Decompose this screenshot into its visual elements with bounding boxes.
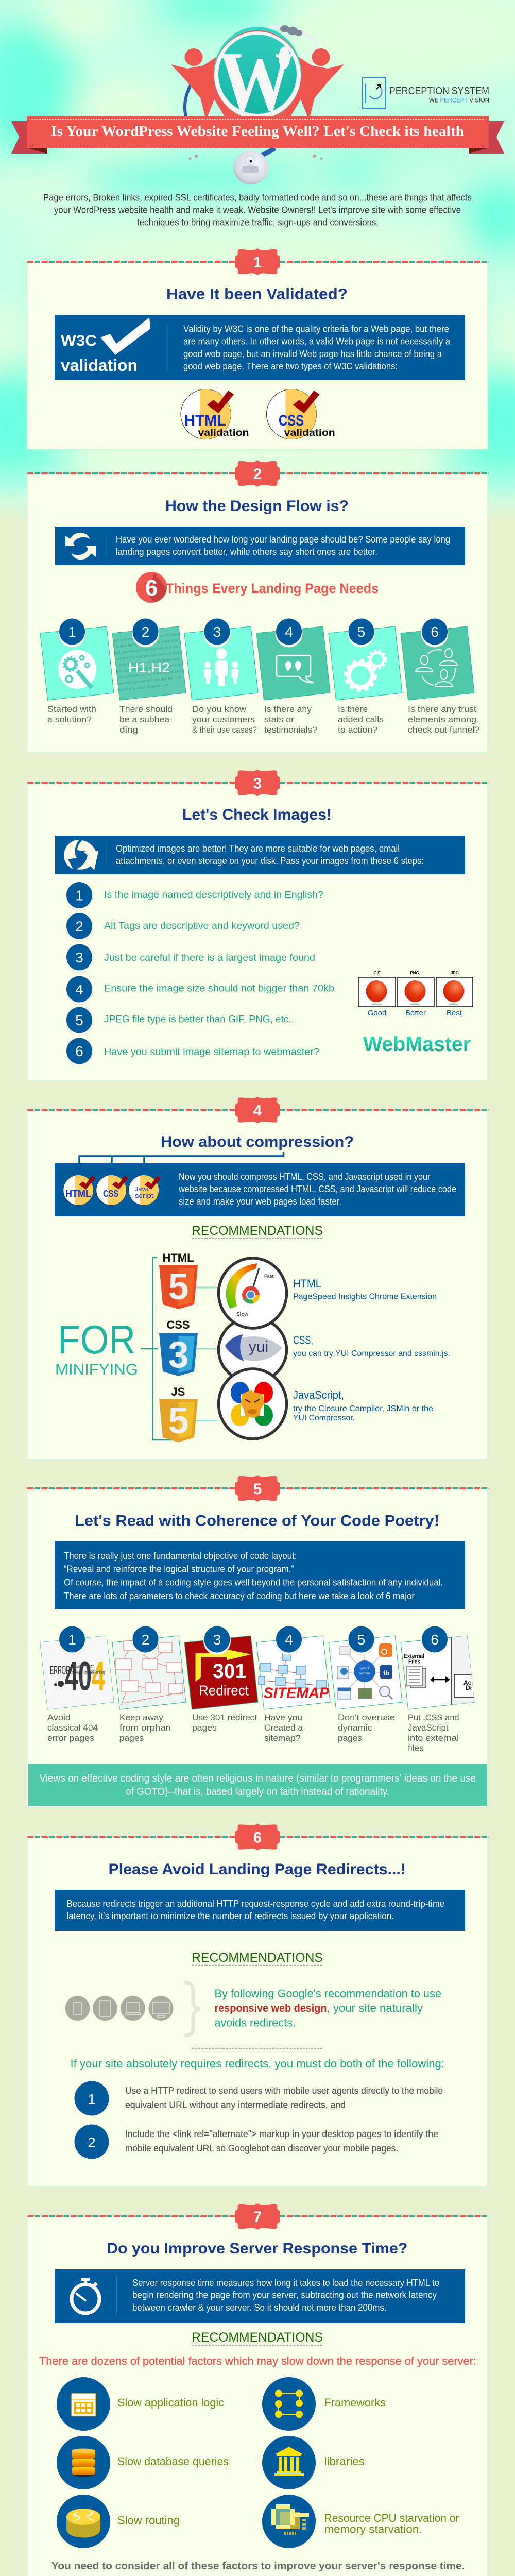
card 6: external files (400, 1635, 475, 1751)
icon: JS shield: JS (171, 1385, 185, 1398)
icon: HTML validation: validation (198, 428, 249, 438)
heading: Please Avoid Landing Page Redirects...! (108, 1861, 406, 1878)
closing note: You need to consider all of these factors to improve your server's response time. (52, 2561, 465, 2572)
number circles: 5 (357, 1632, 365, 1648)
responsive design text: responsive web design (214, 2002, 327, 2014)
card 6: external files: Files (408, 1658, 420, 1665)
number circles: 5 (357, 624, 365, 640)
icon: JS shield (159, 1385, 198, 1443)
card 5: calls to action: to action? (338, 725, 377, 735)
icon: CSS3 shield: CSS (166, 1318, 190, 1331)
callout: W3C: validation (61, 356, 138, 375)
image format comparison: Best (447, 1009, 462, 1018)
card 1: solution (40, 626, 114, 724)
card 2: orphan pages: from orphan (119, 1723, 171, 1733)
badge 4: 4 (253, 1103, 262, 1119)
callout: landing page length (55, 527, 465, 565)
card 6: external files: Put .CSS and (408, 1713, 459, 1722)
icon: HTML5 shield: HTML (162, 1251, 194, 1264)
HTML recommendation (293, 1277, 437, 1301)
steps list: 2 (75, 918, 83, 935)
callout: redirects: latency, it's important to minimize the number of redirects issued by your application. (67, 1911, 394, 1921)
bracket lines (141, 1258, 174, 1440)
callout: coding style views: of GOTO)--that is, based largely on faith instead of rationality. (126, 1786, 389, 1798)
item 2 (74, 2125, 438, 2159)
callout: landing page length: Have you ever wondered how long your landing page should be? Some people say long (116, 534, 450, 545)
callout: W3C: good web page, but an invalid Web page has little chance of being a (183, 349, 442, 359)
callout: W3C: Validity by W3C is one of the quality criteria for a Web page, but there (183, 324, 449, 334)
card 5: dynamic pages: pages (338, 1733, 362, 1743)
intro text (43, 193, 472, 228)
number circles: 3 (213, 1632, 221, 1648)
factor: resource starvation: memory starvation. (324, 2522, 422, 2536)
JavaScript recommendation: YUI Compressor. (293, 1414, 355, 1422)
card 3: 301 redirect: Redirect (199, 1683, 249, 1698)
number circles: 2 (142, 1632, 149, 1648)
icon: PageSpeed gauge oval (218, 1258, 286, 1328)
sub-heading: If your site absolutely requires redirects, you must do both of the following: (70, 2057, 444, 2070)
card 1: 404: classical 404 (47, 1723, 98, 1733)
steps list: 1 (75, 887, 83, 904)
image format comparison: PNG (410, 971, 419, 975)
card 1: 404: Avoid (47, 1713, 71, 1722)
callout: compress: script (135, 1192, 153, 1199)
sub-heading: 6 things: 6 (145, 575, 158, 601)
recommendations heading: RECOMMENDATIONS (192, 1951, 323, 1965)
card 6: trust elements: check out funnel? (408, 725, 479, 735)
for minifying label: MINIFYING (55, 1361, 138, 1378)
main title: Is Your WordPress Website Feeling Well? Let's Check its health (51, 124, 464, 140)
callout: redirects: Because redirects trigger an additional HTTP request-response cycle and add extra round-trip-time (67, 1899, 444, 1909)
card 4: sitemap (256, 1636, 330, 1743)
steps list: Have you submit image sitemap to webmaster? (104, 1047, 319, 1058)
number circles: 1 (68, 624, 76, 640)
connectors to ovals (195, 1287, 218, 1421)
card 3: customers (184, 626, 258, 735)
heading: Let's Read with Coherence of Your Code Poetry! (75, 1513, 439, 1529)
card 1: 404: 404 (65, 1653, 105, 1699)
responsive design text (214, 1987, 441, 2029)
callout: optimized images: Optimized images are better! They are more suitable for web pages, email (116, 843, 400, 854)
badge 3 (235, 770, 280, 796)
card 1: 404: the PAGE you ARE looking (71, 1670, 105, 1676)
number circles: 1 (68, 1632, 76, 1648)
card 4: sitemap: SITEMAP (264, 1685, 330, 1702)
card 6: external files: JavaScript (408, 1723, 449, 1733)
steps list: Just be careful if there is a largest image found (104, 953, 315, 963)
card 4: testimonials: testimonials? (264, 725, 317, 735)
card 2: subheading: text text text text text text text text text text text (109, 662, 188, 674)
steps list: 5 (75, 1012, 83, 1028)
responsive design text: By following Google's recommendation to use (214, 1987, 441, 2000)
card 3: 301 redirect: 301 (213, 1660, 246, 1683)
factor: slow database queries (57, 2436, 229, 2489)
card 2: subheading: text text text text text text text text text text text (107, 643, 186, 656)
number circles (59, 618, 448, 647)
factor: slow database queries: Slow database queries (117, 2455, 229, 2468)
card 1: 404: we don't GOTO SAY (70, 1664, 94, 1669)
title ribbon (11, 116, 504, 154)
card 5: dynamic pages: Don't overuse (338, 1713, 395, 1722)
card 1: 404 (40, 1636, 114, 1743)
heading: Do you Improve Server Response Time? (107, 2240, 407, 2257)
badge 6: 6 (253, 1829, 262, 1846)
number circles: 4 (285, 1632, 293, 1648)
responsive design text: , your site naturally (327, 2002, 423, 2014)
icon: HTML5 shield: 5 (168, 1266, 189, 1308)
badge 4 (235, 1096, 280, 1123)
callout: redirects (55, 1890, 465, 1931)
item 2: Include the <link rel="alternate"> markup in your desktop pages to identify the (125, 2129, 438, 2139)
panel 6: landing page redirects (26, 1824, 489, 2187)
icon: YUI oval: yui (249, 1338, 268, 1355)
icon: HTML validation: HTML (184, 412, 226, 429)
factor: frameworks (262, 2377, 386, 2431)
recommendations heading: RECOMMENDATIONS (192, 1224, 323, 1238)
callout: coding style views: Views on effective coding style are often religious in nature (similar to programmers' ideas on the use (39, 1773, 476, 1784)
CSS recommendation: CSS, (293, 1333, 313, 1347)
card 2: subheading (112, 626, 186, 735)
card 2: orphan pages (112, 1636, 186, 1743)
factor: libraries (262, 2436, 365, 2489)
icon: CSS validation: CSS (279, 412, 304, 429)
icon: CSS3 shield: 3 (168, 1334, 189, 1376)
panel 1: validation (26, 248, 489, 449)
callout: compress: Now you should compress HTML, CSS, and Javascript used in your (179, 1172, 431, 1182)
badge 6 (235, 1824, 280, 1851)
badge 5: 5 (253, 1481, 262, 1498)
steps list: Ensure the image size should not bigger than 70kb (104, 983, 334, 994)
callout: optimized images: attachments, or even storage on your disk. Pass your images from these 6 steps: (116, 856, 424, 866)
hero illustration: WordPress logo with stethoscope: W (218, 34, 293, 128)
panel 4: compression (26, 1096, 489, 1460)
JavaScript recommendation (293, 1388, 433, 1422)
factor: resource starvation (262, 2495, 459, 2548)
connector lines (79, 1152, 283, 1163)
card 2: orphan pages: Keep away (119, 1713, 163, 1722)
icon: PageSpeed gauge oval: Slow (236, 1312, 249, 1317)
callout: code layout (55, 1541, 465, 1609)
JavaScript recommendation: JavaScript, (293, 1388, 344, 1401)
icon: PageSpeed gauge oval: Fast (264, 1274, 274, 1279)
logo: Perception System (363, 78, 489, 109)
factor: slow application logic: Slow application logic (117, 2396, 224, 2409)
card 6: external files: External (404, 1653, 424, 1660)
card 4: testimonials: stats or (264, 715, 294, 724)
callout: compress: CSS (103, 1189, 118, 1199)
card 4: testimonials: Is there any (264, 704, 312, 714)
steps list: 4 (75, 981, 83, 997)
callout: optimized images (55, 836, 465, 874)
card 5: dynamic pages (329, 1636, 402, 1743)
card 5: dynamic pages: website (359, 1672, 370, 1675)
icon: CSS validation: validation (284, 428, 335, 438)
icon: CSS3 shield (159, 1318, 198, 1376)
panel 2: design flow (26, 460, 489, 752)
heading: Let's Check Images! (182, 806, 332, 823)
number circles: 3 (213, 624, 221, 640)
heading: Have It been Validated? (166, 285, 348, 303)
factor: slow application logic (57, 2377, 224, 2431)
webmaster logo: WebMaster (363, 1033, 471, 1056)
number circles: 2 (142, 624, 149, 640)
card 2: subheading: There should (119, 704, 173, 714)
steps list (66, 882, 334, 1066)
responsive design text: avoids redirects. (214, 2016, 296, 2029)
card 2: subheading: be a subhea- (119, 715, 173, 724)
callout: landing page length: landing pages convert better, while others say short ones are better. (116, 547, 377, 557)
brace (184, 1982, 200, 2036)
card 6: external files: files (408, 1743, 424, 1753)
icon: YUI oval (218, 1317, 286, 1382)
intro text: your WordPress website health and make it weak. Website Owners!! Let's improve site with some effective (54, 205, 461, 215)
card 2: subheading: text text text text text text text text text text text (105, 631, 185, 644)
hero illustration: WordPress logo with stethoscope (171, 25, 344, 184)
steps list: JPEG file type is better than GIF, PNG, etc.. (104, 1014, 294, 1025)
card 5: dynamic pages: fb (383, 1669, 389, 1677)
callout: compress (55, 1163, 465, 1216)
callout: response time: between crawler & your server. So it should not more than 200ms. (132, 2302, 386, 2313)
factor: slow routing (57, 2495, 180, 2548)
callout: W3C: good web page. There are two types of W3C validations: (183, 361, 398, 371)
icon: CSS validation (267, 389, 335, 439)
for minifying label (55, 1317, 138, 1378)
panel 5: code poetry (26, 1475, 489, 1807)
callout: compress: website because compressed HTML, CSS, and Javascript will reduce code (178, 1184, 456, 1194)
card 3: customers: your customers (192, 715, 255, 724)
heading: How the Design Flow is? (165, 498, 349, 515)
item 2: mobile equivalent URL so Googlebot can discover your mobile pages. (125, 2143, 398, 2154)
card 2: orphan pages: pages (119, 1733, 144, 1743)
steps list: 3 (75, 950, 83, 965)
icon: devices (65, 1996, 173, 2021)
card 3: customers: & their use cases? (192, 725, 257, 735)
icon: JS shield: 5 (168, 1400, 189, 1442)
callout: code layout: Of course, the impact of a coding style goes well beyond the personal satisfaction of any individual. (64, 1578, 443, 1588)
card 6: external files: into external (408, 1733, 459, 1743)
card 4: sitemap: Created a (264, 1723, 303, 1733)
badge 1 (235, 248, 280, 275)
card 3: 301 redirect: pages (192, 1723, 217, 1733)
card 4: sitemap: Have you (264, 1713, 302, 1722)
steps list: 6 (75, 1043, 83, 1059)
callout: compress: Java (135, 1185, 149, 1193)
card 6: trust elements (401, 626, 479, 735)
badge 7: 7 (253, 2209, 262, 2226)
factor: frameworks: Frameworks (324, 2396, 386, 2409)
badge 2: 2 (253, 466, 262, 483)
callout: W3C (55, 315, 465, 380)
card 2: subheading: text text text text text text text text text text text (108, 655, 187, 668)
HTML recommendation: PageSpeed Insights Chrome Extension (293, 1292, 437, 1301)
card 3: 301 redirect (184, 1636, 258, 1733)
callout: response time: Server response time measures how long it takes to load the necessary HTML to (132, 2278, 439, 2288)
image format comparison: JPG (451, 971, 459, 975)
factor: libraries: libraries (324, 2455, 365, 2468)
badge 3: 3 (253, 775, 262, 792)
heading: How about compression? (161, 1133, 354, 1150)
card 1: solution: a solution? (47, 715, 92, 724)
number circles: 6 (431, 624, 439, 640)
badge 1: 1 (253, 254, 262, 271)
card 3: customers: Do you know (192, 704, 247, 714)
logo: Perception System: PERCEPTION SYSTEM (389, 86, 489, 97)
card 1: 404: ERROR (50, 1664, 70, 1677)
CSS recommendation: you can try YUI Compressor and cssmin.js. (293, 1349, 450, 1358)
item 1: equivalent URL without any intermediate redirects, and (125, 2100, 346, 2110)
callout: code layout: There is really just one fundamental objective of code layout: (64, 1551, 297, 1561)
number circles: 4 (285, 624, 293, 640)
HTML recommendation: HTML (293, 1277, 321, 1290)
card 6: external files: Dri (466, 1684, 474, 1691)
JavaScript recommendation: try the Closure Compiler, JSMin or the (293, 1404, 433, 1413)
sub-heading: 6 things (136, 572, 379, 603)
steps list: Is the image named descriptively and in English? (104, 890, 323, 901)
card 2: subheading: text text text text text text text text text text text (110, 674, 190, 687)
item 1 (74, 2081, 443, 2115)
card 6: trust elements: Is there any trust (408, 704, 476, 714)
sub-heading: There are dozens of potential factors which may slow down the response of your server: (39, 2354, 476, 2367)
intro text: techniques to bring maximize traffic, sign-ups and conversions. (137, 217, 379, 228)
badge 5 (235, 1475, 280, 1502)
image format comparison: Better (405, 1009, 426, 1018)
card 6: trust elements: elements among (408, 715, 476, 724)
item 2: 2 (88, 2134, 96, 2150)
callout: code layout: “Reveal and reinforce the logical structure of your program.” (64, 1564, 294, 1574)
icon: Closure / Grunt oval (218, 1369, 286, 1439)
image format comparison: Good (368, 1009, 386, 1018)
card 5: calls to action: Is there (338, 704, 368, 714)
card 5: dynamic pages: dynamic (338, 1723, 372, 1733)
image format comparison: GIF (373, 971, 381, 975)
callout: W3C: W3C (61, 332, 97, 349)
card 4: testimonials (256, 626, 330, 735)
callout: W3C: are many others. In other words, a valid Web page is not necessarily a (183, 336, 451, 346)
card 6: external files: Acc (464, 1679, 475, 1686)
item 1: Use a HTTP redirect to send users with mobile user agents directly to the mobile (125, 2086, 443, 2096)
callout: response time: begin rendering the page from your server, subtracting out the network latency (132, 2290, 437, 2300)
card 3: 301 redirect: Use 301 redirect (192, 1713, 257, 1722)
card 5: calls to action: added calls (338, 715, 384, 724)
card 4: sitemap: sitemap? (264, 1733, 301, 1743)
badge 2 (235, 460, 280, 487)
card 5: calls to action (329, 626, 402, 735)
factor: slow routing: Slow routing (117, 2514, 180, 2527)
factor: resource starvation: Resource CPU starvation or (324, 2512, 459, 2524)
sub-heading: 6 things: Things Every Landing Page Needs (166, 581, 379, 596)
card 1: 404: error pages (47, 1733, 94, 1743)
steps list: Alt Tags are descriptive and keyword used? (104, 921, 300, 931)
card 2: subheading: text text text text text text text text text text text (106, 637, 186, 650)
CSS recommendation (293, 1333, 450, 1358)
panel 3: images (26, 770, 489, 1080)
card 2: subheading: H1,H2 (128, 659, 170, 675)
icon: HTML validation (181, 389, 249, 439)
badge 7 (235, 2203, 280, 2230)
callout: coding style views (28, 1764, 487, 1806)
recommendations heading: RECOMMENDATIONS (192, 2330, 323, 2345)
number circles (59, 1626, 448, 1655)
card 5: dynamic pages: dynamic (359, 1667, 370, 1670)
item 1: 1 (88, 2091, 96, 2107)
card 2: subheading: text text text text text text text text (111, 682, 168, 693)
number circles: 6 (431, 1632, 439, 1648)
logo: Perception System: WE PERCEPT VISION (429, 98, 489, 104)
panel 7: server response (26, 2203, 489, 2576)
intro text: Page errors, Broken links, expired SSL certificates, badly formatted code and so on...these are things that affects (43, 193, 472, 203)
card 2: subheading: text text text text text text text text text text text (109, 668, 189, 681)
icon: HTML5 shield (159, 1251, 198, 1309)
callout: code layout: There are lots of parameters to check accuracy of coding but here we take a look of 6 major (64, 1591, 415, 1601)
card 2: subheading: ding (119, 725, 138, 735)
image format comparison (358, 971, 473, 1018)
callout: compress: HTML (65, 1189, 91, 1199)
callout: response time (55, 2269, 465, 2323)
callout: compress: size and make your web pages load faster. (179, 1196, 341, 1207)
card 1: solution: Started with (47, 704, 96, 714)
card 2: subheading: text text text text text text text text text text text (107, 649, 187, 662)
for minifying label: FOR (58, 1317, 135, 1362)
